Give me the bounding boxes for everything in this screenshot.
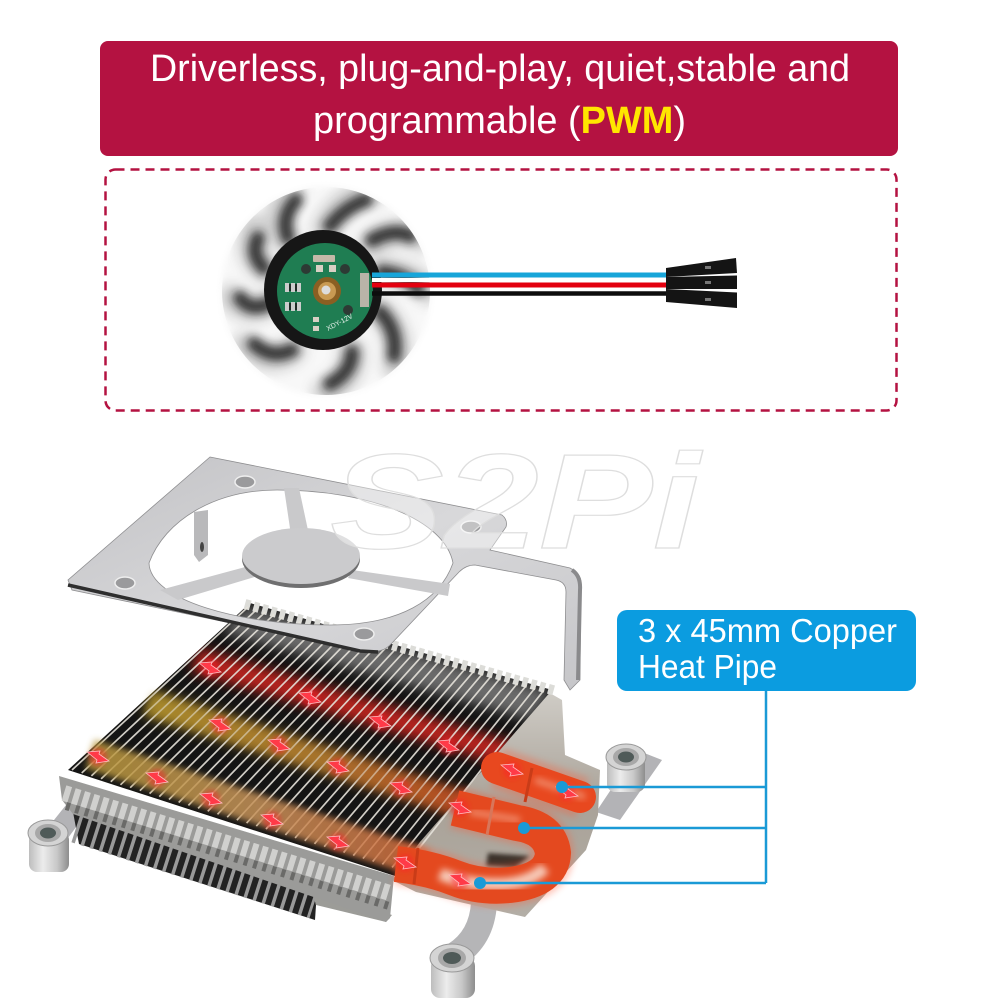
base under fins — [312, 888, 392, 922]
fan hub — [264, 230, 382, 350]
leader lines — [480, 690, 766, 883]
bracket screw holes — [115, 476, 481, 640]
wire: blue — [372, 272, 666, 278]
fin lines — [72, 607, 544, 870]
heat band: back — [195, 660, 535, 762]
callout line 1: 3 x 45mm Copper — [638, 612, 897, 649]
heading line 2: programmable (PWM) — [313, 100, 686, 142]
wire: black — [372, 291, 666, 296]
fan mounting bracket — [68, 457, 581, 690]
red flow arrows — [87, 659, 578, 889]
bracket side edge — [572, 570, 580, 680]
watermark: S2Pi — [330, 426, 703, 577]
heat band: middle — [148, 703, 495, 815]
pipe glow — [396, 768, 582, 886]
fan with wires — [221, 186, 737, 396]
heat tint over middle band — [148, 703, 495, 815]
heatsink — [28, 603, 662, 998]
block inner shadow — [486, 853, 530, 868]
copper heat pipes — [396, 768, 585, 886]
mount foot: right — [606, 744, 646, 792]
green circuit board: XDY-12V — [326, 313, 354, 333]
front clip band — [59, 776, 394, 922]
silver base block — [392, 692, 600, 917]
heat fins top surface — [68, 603, 556, 876]
pipe highlights — [440, 868, 545, 884]
heat band: front — [90, 754, 425, 864]
three-pin connector — [666, 258, 737, 308]
wire: red — [372, 282, 666, 288]
bracket tab — [194, 510, 208, 562]
header banner — [100, 41, 898, 156]
bracket plate — [68, 457, 581, 690]
heat pipes 2 and 3 U-bend — [396, 808, 553, 886]
panel: dashed frame around fan — [106, 170, 896, 410]
wire backing — [372, 278, 666, 282]
fin rear teeth — [245, 604, 556, 691]
bracket shaded front edge — [68, 585, 378, 652]
mount arm: right — [596, 749, 662, 820]
fan blades — [221, 186, 431, 396]
leader dots — [474, 781, 568, 889]
bracket spokes — [160, 488, 450, 600]
heading line 1: Driverless, plug-and-play, quiet,stable and — [150, 48, 850, 90]
mount foot: left — [28, 820, 69, 872]
mount arm: bottom — [455, 903, 484, 955]
mount arm: left — [50, 800, 85, 838]
heat pipe 1 — [497, 768, 580, 797]
collars — [525, 768, 532, 802]
callout line 2: Heat Pipe — [638, 648, 777, 685]
callout: heat pipe — [617, 610, 916, 691]
green circuit board — [277, 243, 373, 339]
lower fin teeth — [73, 812, 316, 920]
mount foot: bottom — [430, 944, 475, 998]
